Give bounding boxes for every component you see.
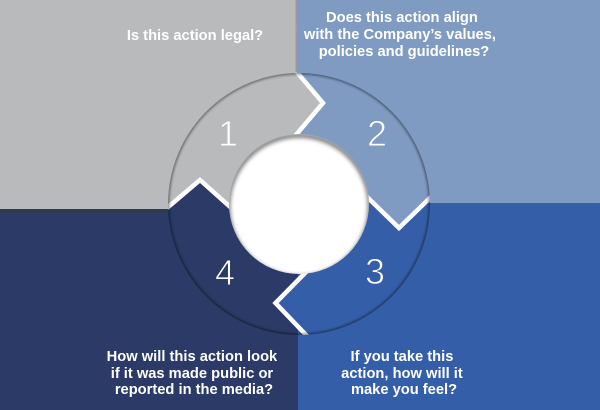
text: question 2: Does this action align (326, 10, 478, 26)
text: question 2: with the Company’s values, (303, 27, 496, 43)
text: question 4: How will this action look (107, 349, 278, 365)
center circle (228, 134, 370, 278)
number 4: 4 (215, 252, 235, 293)
panel: navy quadrant, media (0, 213, 298, 410)
text: question 1: Is this action legal? (127, 28, 263, 44)
arrow: gray segment tip (294, 73, 326, 134)
text: question 4: if it was made public or (111, 366, 273, 382)
text: question 3: If you take this (351, 349, 453, 365)
panel: mid blue quadrant, feelings (298, 203, 600, 410)
panel: gray quadrant, legal (0, 0, 297, 213)
text: question 4: reported in the media? (115, 382, 273, 398)
panel: light blue quadrant, values (297, 0, 600, 203)
arrow: mid blue segment tip (272, 273, 309, 335)
number 2: 2 (367, 113, 387, 154)
ring edge shadow (168, 73, 430, 335)
arrow: light blue segment tip (368, 195, 430, 231)
diagram: interlocking arrow ring (168, 73, 430, 335)
number 3: 3 (365, 251, 385, 292)
text: question 3: action, how will it (341, 366, 463, 382)
arrow: navy segment tip (168, 177, 230, 210)
text: question 3: make you feel? (351, 382, 457, 398)
number 1: 1 (218, 113, 238, 154)
text: question 2: policies and guidelines? (319, 44, 489, 60)
